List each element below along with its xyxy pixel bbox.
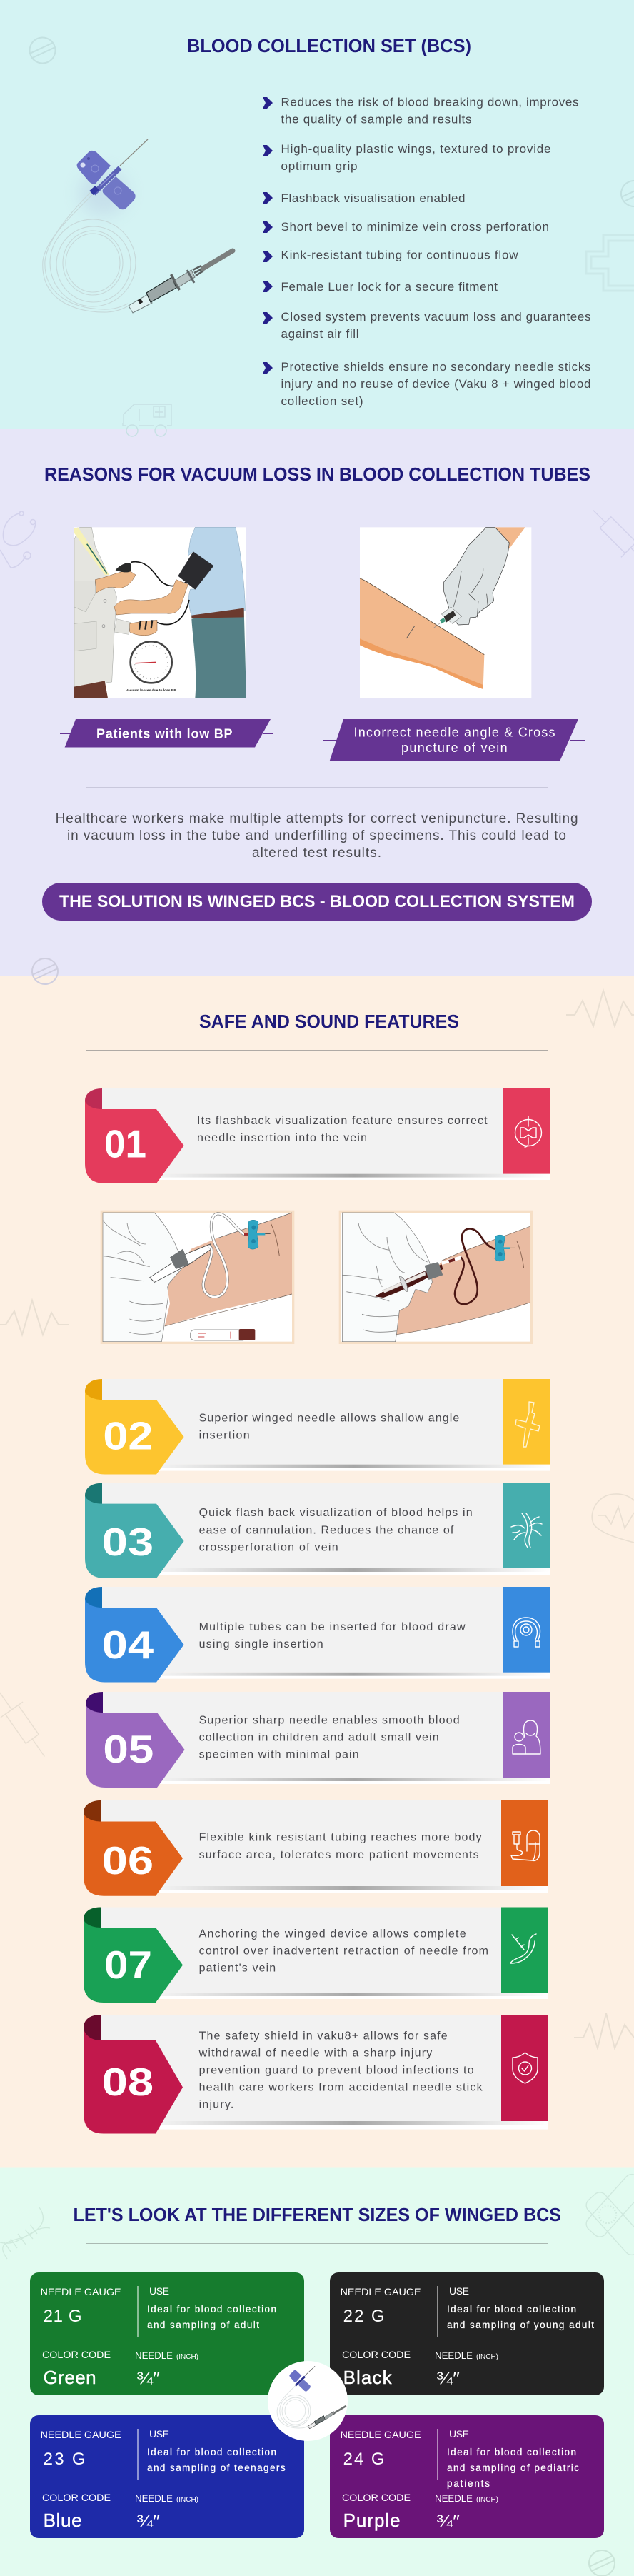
- size card: 23 G blue: (INCH): [176, 2496, 198, 2504]
- size card: 24 G purple: [330, 2415, 604, 2538]
- size card: 22 G black: USE: [449, 2285, 469, 2297]
- icon block: tubing coil: [503, 1587, 550, 1673]
- description: The safety shield in vaku8+ allows for safe: [199, 2030, 448, 2042]
- bullet: protective shields: collection set): [281, 394, 363, 408]
- illustration: step two, blood flashback: [340, 1211, 532, 1343]
- panel background: blood collection set: [0, 0, 634, 429]
- feature card 05: [86, 1692, 550, 1788]
- size card: 22 G black: Ideal for blood collection: [447, 2304, 576, 2315]
- size card: 22 G black: (INCH): [476, 2353, 498, 2361]
- bullet: protective shields: Protective shields ensure no secondary needle sticks: [281, 360, 591, 374]
- label banner: patients with low BP: [60, 719, 273, 747]
- icon: bandage: [583, 2172, 634, 2257]
- section: safe and sound features: [84, 1012, 550, 2134]
- icon: pill bottom right: [585, 2546, 619, 2576]
- label banner: incorrect needle angle: [323, 719, 585, 761]
- icon block: mother and child: [503, 1692, 550, 1778]
- feature card 07: [84, 1907, 548, 2003]
- size card: 22 G black: Black: [343, 2367, 393, 2388]
- bullet: reduces risk: the quality of sample and results: [281, 112, 471, 126]
- size card: 21 G green: USE: [149, 2285, 169, 2297]
- description: Superior sharp needle enables smooth blood: [199, 1714, 460, 1727]
- description: control over inadvertent retraction of needle from: [199, 1945, 488, 1957]
- number: 05: [103, 1727, 154, 1771]
- bullet: flashback: Flashback visualisation enabled: [281, 191, 466, 205]
- divider: [86, 2243, 548, 2244]
- icon: pulse top right: [566, 991, 634, 1026]
- icon: heart with pulse: [592, 1494, 634, 1543]
- description: injury.: [199, 2098, 233, 2111]
- size card: 21 G green: (INCH): [176, 2353, 198, 2361]
- size card: 23 G blue: COLOR CODE: [42, 2492, 111, 2503]
- bullet: kink resistant: Kink-resistant tubing for continuous flow: [281, 248, 518, 261]
- bullet: closed system: Closed system prevents vacuum loss and guarantees: [281, 310, 591, 324]
- bullet: reduces risk: Reduces the risk of blood breaking down, improves: [281, 96, 578, 109]
- size card: 23 G blue: and sampling of teenagers: [147, 2462, 286, 2473]
- ribbon: [85, 1101, 184, 1183]
- size card: 22 G black: [330, 2272, 604, 2395]
- body text: venipuncture attempts: [56, 811, 578, 861]
- feature card 01: [85, 1088, 550, 1183]
- size card: 23 G blue: NEEDLE GAUGE: [41, 2429, 121, 2440]
- description: using single insertion: [199, 1638, 323, 1650]
- number: 06: [102, 1838, 154, 1883]
- description: prevention guard to prevent blood infections to: [199, 2064, 474, 2077]
- size card: 23 G blue: Blue: [44, 2510, 82, 2531]
- size card: 24 G purple: patients: [447, 2478, 490, 2489]
- size card: 24 G purple: and sampling of pediatric: [447, 2462, 579, 2473]
- gauge caption: Vacuum losses due to loss BP: [126, 688, 176, 692]
- size card: 24 G purple: NEEDLE GAUGE: [341, 2429, 421, 2440]
- illustration: step one, clean tubing: [101, 1211, 293, 1343]
- size card: 24 G purple: USE: [449, 2428, 469, 2440]
- icon: syringe right: [584, 501, 634, 569]
- bullet: reduces risk: [263, 96, 578, 126]
- description: ease of cannulation. Reduces the chance of: [199, 1524, 454, 1536]
- heading: safe and sound features: SAFE AND SOUND FEATURES: [199, 1012, 459, 1032]
- panel background: reasons for vacuum loss: [0, 429, 634, 976]
- size card: 21 G green: Green: [44, 2367, 96, 2388]
- description: insertion: [199, 1430, 250, 1441]
- size card: 22 G black: NEEDLE: [435, 2350, 473, 2361]
- size card: 23 G blue: ¾″: [136, 2512, 161, 2531]
- size card: 21 G green: NEEDLE: [135, 2350, 173, 2361]
- description: [197, 1115, 488, 1144]
- divider: [86, 787, 548, 788]
- size card: 24 G purple: Ideal for blood collection: [447, 2447, 576, 2457]
- label banner: incorrect needle angle: puncture of vein: [401, 741, 508, 755]
- description: patient's vein: [199, 1963, 276, 1975]
- description: withdrawal of needle with a sharp injury: [198, 2047, 432, 2059]
- heading: different sizes: LET'S LOOK AT THE DIFFERENT SIZES OF WINGED BCS: [73, 2205, 561, 2225]
- label banner: patients with low BP: Patients with low BP: [96, 727, 233, 741]
- description: crossperforation of vein: [199, 1541, 338, 1554]
- callout: the solution: THE SOLUTION IS WINGED BCS - BLOOD COLLECTION SYSTEM: [59, 892, 575, 911]
- feature bullet list: [263, 96, 591, 408]
- size card: 22 G black: NEEDLE GAUGE: [341, 2286, 421, 2297]
- size card: 21 G green: Ideal for blood collection: [147, 2304, 276, 2315]
- feature card 03: [85, 1483, 550, 1578]
- size card: 24 G purple: NEEDLE: [435, 2492, 473, 2504]
- icon block: branching veins: [503, 1483, 550, 1568]
- section: reasons for vacuum loss: [42, 465, 592, 921]
- heading: blood collection set: BLOOD COLLECTION SET (BCS): [187, 36, 471, 56]
- description: Flexible kink resistant tubing reaches more body: [199, 1832, 482, 1844]
- bullet: closed system: against air fill: [281, 327, 358, 341]
- size card: 23 G blue: USE: [149, 2428, 169, 2440]
- ribbon: [85, 1391, 184, 1474]
- size card: 23 G blue: [30, 2415, 304, 2538]
- size card: 24 G purple: Purple: [343, 2510, 401, 2531]
- size card: 21 G green: 21 G: [44, 2307, 82, 2326]
- icon block: winged needle: [503, 1379, 550, 1465]
- size card: 22 G black: and sampling of young adult: [447, 2320, 594, 2330]
- number: 03: [102, 1520, 154, 1564]
- description: Its flashback visualization feature ensures correct: [197, 1115, 488, 1127]
- icon: pulse left: [0, 1300, 69, 1335]
- size card: 22 G black: 22 G: [343, 2307, 385, 2326]
- bullet: luer lock: Female Luer lock for a secure fitment: [281, 280, 498, 294]
- size card: 21 G green: and sampling of adult: [147, 2320, 259, 2330]
- icon block: needle in leg: [501, 1907, 548, 1993]
- icon: pill lower left: [28, 954, 62, 988]
- size card: 21 G green: NEEDLE GAUGE: [41, 2286, 121, 2297]
- bullet: protective shields: injury and no reuse of device (Vaku 8 + winged blood: [281, 377, 591, 391]
- description: surface area, tolerates more patient movements: [199, 1849, 479, 1861]
- body text: venipuncture attempts: Healthcare workers make multiple attempts for correct venipuncture. Resulting: [56, 811, 578, 826]
- bullet: plastic wings: optimum grip: [281, 159, 357, 173]
- ribbon: [86, 1704, 185, 1788]
- size card: 23 G blue: 23 G: [44, 2450, 86, 2469]
- description: [199, 1832, 482, 1861]
- bullet: protective shields: [263, 360, 591, 408]
- icon block: butterfly needle: [503, 1088, 550, 1174]
- description: health care workers from accidental needle stick: [199, 2081, 483, 2093]
- size card: 22 G black: ¾″: [436, 2369, 461, 2388]
- panel background: safe and sound features: [0, 976, 634, 2168]
- bullet: plastic wings: [263, 142, 551, 173]
- size card: 21 G green: ¾″: [136, 2369, 161, 2388]
- number: 07: [104, 1943, 152, 1987]
- product photo: winged blood collection set: [43, 139, 233, 313]
- ribbon: [84, 2028, 183, 2134]
- description: collection in children and adult small vein: [199, 1732, 439, 1744]
- icon: syringe left: [0, 1684, 56, 1764]
- description: [199, 1928, 488, 1975]
- illustration: patient with low blood pressure: [74, 527, 246, 698]
- icon: medical cross: [586, 235, 634, 291]
- description: [199, 1507, 473, 1554]
- number: 01: [104, 1122, 146, 1166]
- number: 02: [103, 1414, 153, 1458]
- description: [199, 1714, 460, 1761]
- size card: 24 G purple: (INCH): [476, 2496, 498, 2504]
- description: Anchoring the winged device allows complete: [199, 1928, 466, 1940]
- size card: 22 G black: COLOR CODE: [342, 2349, 411, 2360]
- illustration: incorrect needle angle: [360, 527, 531, 698]
- description: Multiple tubes can be inserted for blood draw: [199, 1621, 466, 1633]
- size card: 23 G blue: Ideal for blood collection: [147, 2447, 276, 2457]
- size card: 24 G purple: ¾″: [436, 2512, 461, 2531]
- description: specimen with minimal pain: [199, 1749, 359, 1761]
- icon: DNA helix: [0, 2207, 50, 2259]
- description: Quick flash back visualization of blood helps in: [199, 1507, 473, 1519]
- icon: stethoscope: [0, 511, 36, 568]
- size card: 24 G purple: COLOR CODE: [342, 2492, 411, 2503]
- bullet: closed system: [263, 310, 591, 341]
- body text: venipuncture attempts: altered test results.: [252, 846, 381, 861]
- description: [198, 2030, 483, 2111]
- ribbon: [84, 1813, 183, 1896]
- heading: reasons for vacuum loss: REASONS FOR VACUUM LOSS IN BLOOD COLLECTION TUBES: [44, 465, 590, 485]
- feature card 02: [85, 1379, 550, 1474]
- size card: 24 G purple: 24 G: [343, 2450, 385, 2469]
- feature card 04: [85, 1587, 550, 1683]
- section: blood collection set: [43, 36, 590, 408]
- number: 08: [102, 2060, 154, 2104]
- size card: 21 G green: COLOR CODE: [42, 2349, 111, 2360]
- icon: pill top left: [26, 34, 59, 67]
- center circle with product photo: [268, 2361, 348, 2441]
- icon: ambulance: [123, 404, 171, 436]
- number: 04: [102, 1623, 154, 1667]
- section: sizes of winged BCS: [30, 2205, 604, 2538]
- body text: venipuncture attempts: in vacuum loss in the tube and underfilling of specimens. This could lead to: [67, 828, 566, 843]
- divider: [86, 1050, 548, 1051]
- description: Superior winged needle allows shallow angle: [199, 1413, 459, 1424]
- description: needle insertion into the vein: [197, 1132, 367, 1144]
- icon: pill right: [617, 176, 634, 211]
- panel background: winged BCS sizes: [0, 2168, 634, 2576]
- size card: 23 G blue: NEEDLE: [135, 2492, 173, 2504]
- icon block: tube and hand: [501, 1800, 548, 1886]
- ribbon: [85, 1599, 184, 1683]
- ribbon: [84, 1919, 183, 2003]
- ribbon: [85, 1495, 184, 1578]
- icon block: safety shield: [501, 2015, 548, 2121]
- label banner: incorrect needle angle: Incorrect needle angle & Cross: [354, 726, 555, 740]
- bullet: short bevel: Short bevel to minimize vein cross perforation: [281, 220, 549, 234]
- bullet: plastic wings: High-quality plastic wings, textured to provide: [281, 142, 551, 156]
- description: [199, 1621, 466, 1650]
- feature card 06: [84, 1800, 548, 1896]
- description: [199, 1413, 459, 1441]
- size card: 21 G green: [30, 2272, 304, 2395]
- feature card 08: [84, 2015, 548, 2134]
- icon: pulse right lower: [574, 2013, 634, 2048]
- callout: the solution: [42, 883, 592, 921]
